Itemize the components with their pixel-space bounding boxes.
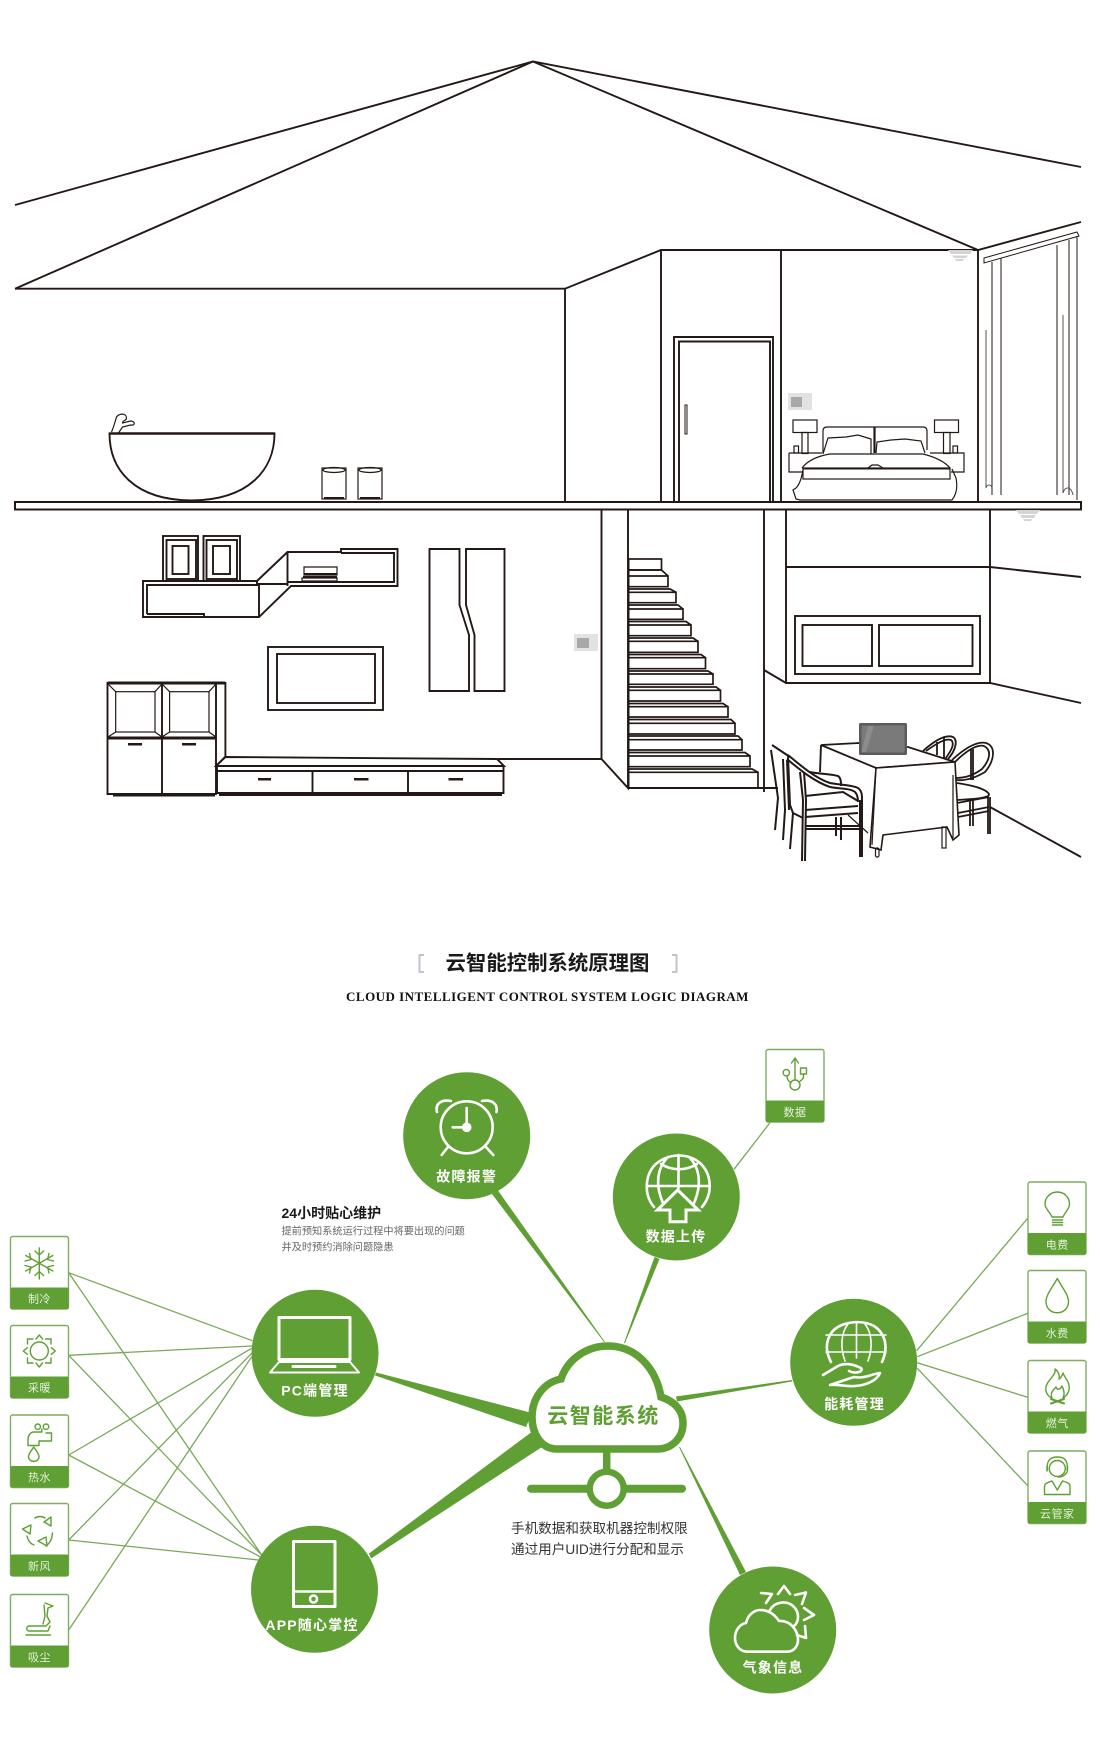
cloud label: 云智能系统 — [547, 1404, 660, 1428]
icon: USB — [783, 1058, 806, 1090]
icon: headset agent — [1044, 1457, 1070, 1494]
tablet on table — [859, 723, 907, 755]
cloud caption: 手机数据和获取机器控制权限 — [511, 1520, 688, 1536]
bathtub — [110, 414, 274, 500]
card: hot water — [10, 1415, 68, 1488]
circle: alarm: 故障报警 — [436, 1168, 497, 1184]
left chairs — [771, 745, 868, 861]
icon: sun — [23, 1335, 55, 1367]
icon: alarm clock — [437, 1101, 497, 1155]
floor slab — [15, 502, 1081, 510]
icon: snowflake — [25, 1248, 54, 1279]
circle: data upload: 数据上传 — [646, 1228, 706, 1244]
card: cloud butler — [1028, 1451, 1086, 1524]
wall TV frame — [268, 647, 383, 710]
card: heating — [10, 1326, 68, 1398]
central cloud system — [531, 1346, 683, 1506]
tall wall panels — [430, 549, 504, 691]
icon: faucet and drop — [28, 1424, 52, 1461]
card: cloud butler: 云管家 — [1040, 1506, 1075, 1520]
card: water fee: 水费 — [1046, 1327, 1069, 1340]
dining table with cloth — [820, 743, 959, 857]
icon: lower wall switch — [574, 634, 598, 651]
circle: weather — [709, 1566, 836, 1694]
heading — [346, 946, 749, 1004]
card: fresh air — [10, 1504, 68, 1576]
upper floor walls — [565, 250, 978, 501]
connector lines: energy to right cards — [917, 1218, 1028, 1486]
wall shelves — [143, 549, 398, 617]
icon: sun behind cloud — [735, 1586, 814, 1652]
card: electricity — [1028, 1182, 1086, 1254]
card: data: 数据 — [784, 1105, 806, 1119]
card: fresh air: 新风 — [28, 1559, 51, 1573]
card: data — [766, 1050, 824, 1122]
card: gas — [1028, 1360, 1086, 1433]
icon: tablet phone — [294, 1542, 335, 1606]
TV cabinet — [216, 757, 504, 796]
text block: 24h maintenance: 提前预知系统运行过程中将要出现的问题 — [282, 1224, 465, 1238]
circle: data upload — [613, 1134, 740, 1260]
tapered connectors to cloud — [369, 1190, 792, 1575]
stacked books — [302, 567, 337, 581]
card: hot water: 热水 — [28, 1471, 51, 1484]
illustration: house cross-section — [15, 62, 1081, 861]
circle: alarm — [403, 1072, 530, 1199]
cloud caption — [511, 1520, 688, 1557]
card: cooling: 制冷 — [28, 1292, 51, 1306]
icon: globe upload — [647, 1155, 710, 1222]
card: gas: 燃气 — [1046, 1416, 1069, 1430]
network node — [531, 1450, 682, 1506]
icon: ceiling sensor upper — [948, 250, 973, 261]
lower floor walls — [498, 509, 1081, 857]
door — [674, 337, 773, 501]
icon: flame — [1046, 1369, 1069, 1404]
picture frames — [163, 536, 240, 582]
icon: upper wall switch — [788, 393, 812, 410]
connector line: data card — [734, 1123, 770, 1169]
card: electricity: 电费 — [1046, 1238, 1069, 1252]
display cabinet — [108, 683, 225, 796]
circle: energy management: 能耗管理 — [824, 1396, 885, 1412]
card: water fee — [1028, 1270, 1086, 1343]
text block: 24h maintenance: 并及时预约消除问题隐患 — [282, 1240, 394, 1254]
text block: 24h maintenance — [282, 1205, 465, 1254]
cloud outline — [532, 1346, 683, 1449]
icon: ceiling sensor lower — [1016, 510, 1040, 521]
card: cooling — [10, 1236, 68, 1309]
connector lines: devices to PC and APP — [69, 1273, 262, 1630]
heading brackets — [420, 955, 676, 972]
two cylinders — [322, 468, 382, 500]
card: vacuum — [10, 1594, 68, 1667]
clerestory window — [795, 616, 980, 674]
right chairs — [923, 736, 993, 834]
bed and night stands — [789, 420, 964, 500]
heading: Chinese: 云智能控制系统原理图 — [446, 946, 649, 976]
cloud caption: 通过用户UID进行分配和显示 — [511, 1541, 684, 1557]
card: vacuum: 吸尘 — [28, 1651, 51, 1664]
curtains — [984, 232, 1079, 500]
text block: 24h maintenance: 24小时贴心维护 — [282, 1205, 381, 1221]
icon: globe in hand — [823, 1322, 886, 1386]
roof lines — [15, 62, 1081, 289]
circle: PC: PC端管理 — [281, 1382, 349, 1398]
circle: weather: 气象信息 — [743, 1660, 803, 1676]
icon: recycling arrows — [22, 1516, 52, 1546]
circle: APP: APP随心掌控 — [265, 1617, 359, 1633]
circle: APP — [251, 1526, 378, 1653]
circle: PC — [252, 1290, 378, 1417]
icon: water drop — [1046, 1278, 1068, 1313]
staircase — [628, 559, 758, 788]
icon: vacuum cleaner — [26, 1603, 53, 1635]
circle: energy management — [790, 1299, 917, 1426]
icon: light bulb — [1045, 1192, 1070, 1225]
heading: English: CLOUD INTELLIGENT CONTROL SYSTEM LOGIC DIAGRAM — [346, 989, 749, 1004]
icon: laptop — [270, 1318, 359, 1372]
card: heating: 采暖 — [28, 1382, 51, 1394]
